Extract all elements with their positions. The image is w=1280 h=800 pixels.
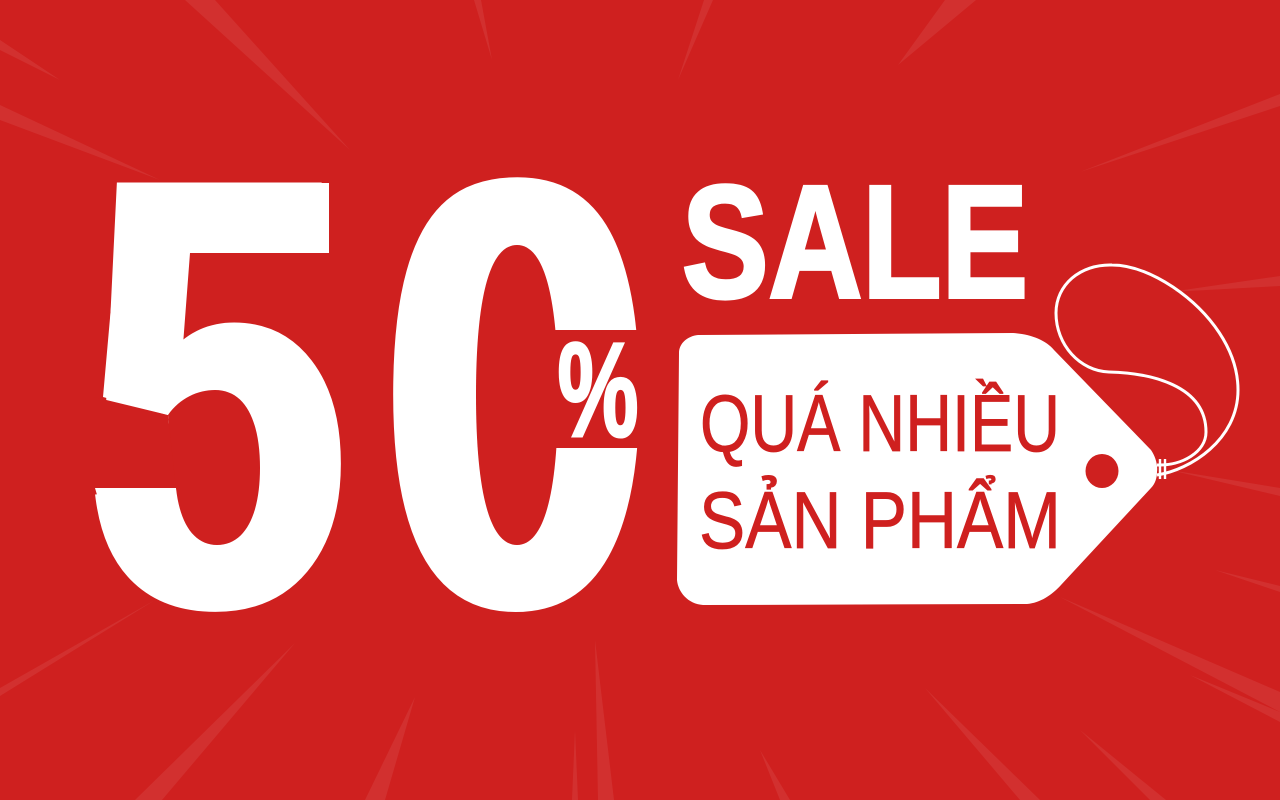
tag hole [1086, 454, 1118, 488]
heading: SALE: SALE [682, 152, 1028, 331]
tag text line 2: SẢN PHẨM [699, 475, 1061, 566]
big number 5: 5 [84, 55, 351, 730]
big number 0: 0 [373, 51, 661, 737]
tag text line 1: QUÁ NHIỀU [700, 378, 1060, 469]
tag body [677, 333, 1157, 605]
price tag [677, 265, 1238, 605]
tag string [1056, 265, 1238, 479]
percent sign cutout: % [558, 316, 639, 465]
